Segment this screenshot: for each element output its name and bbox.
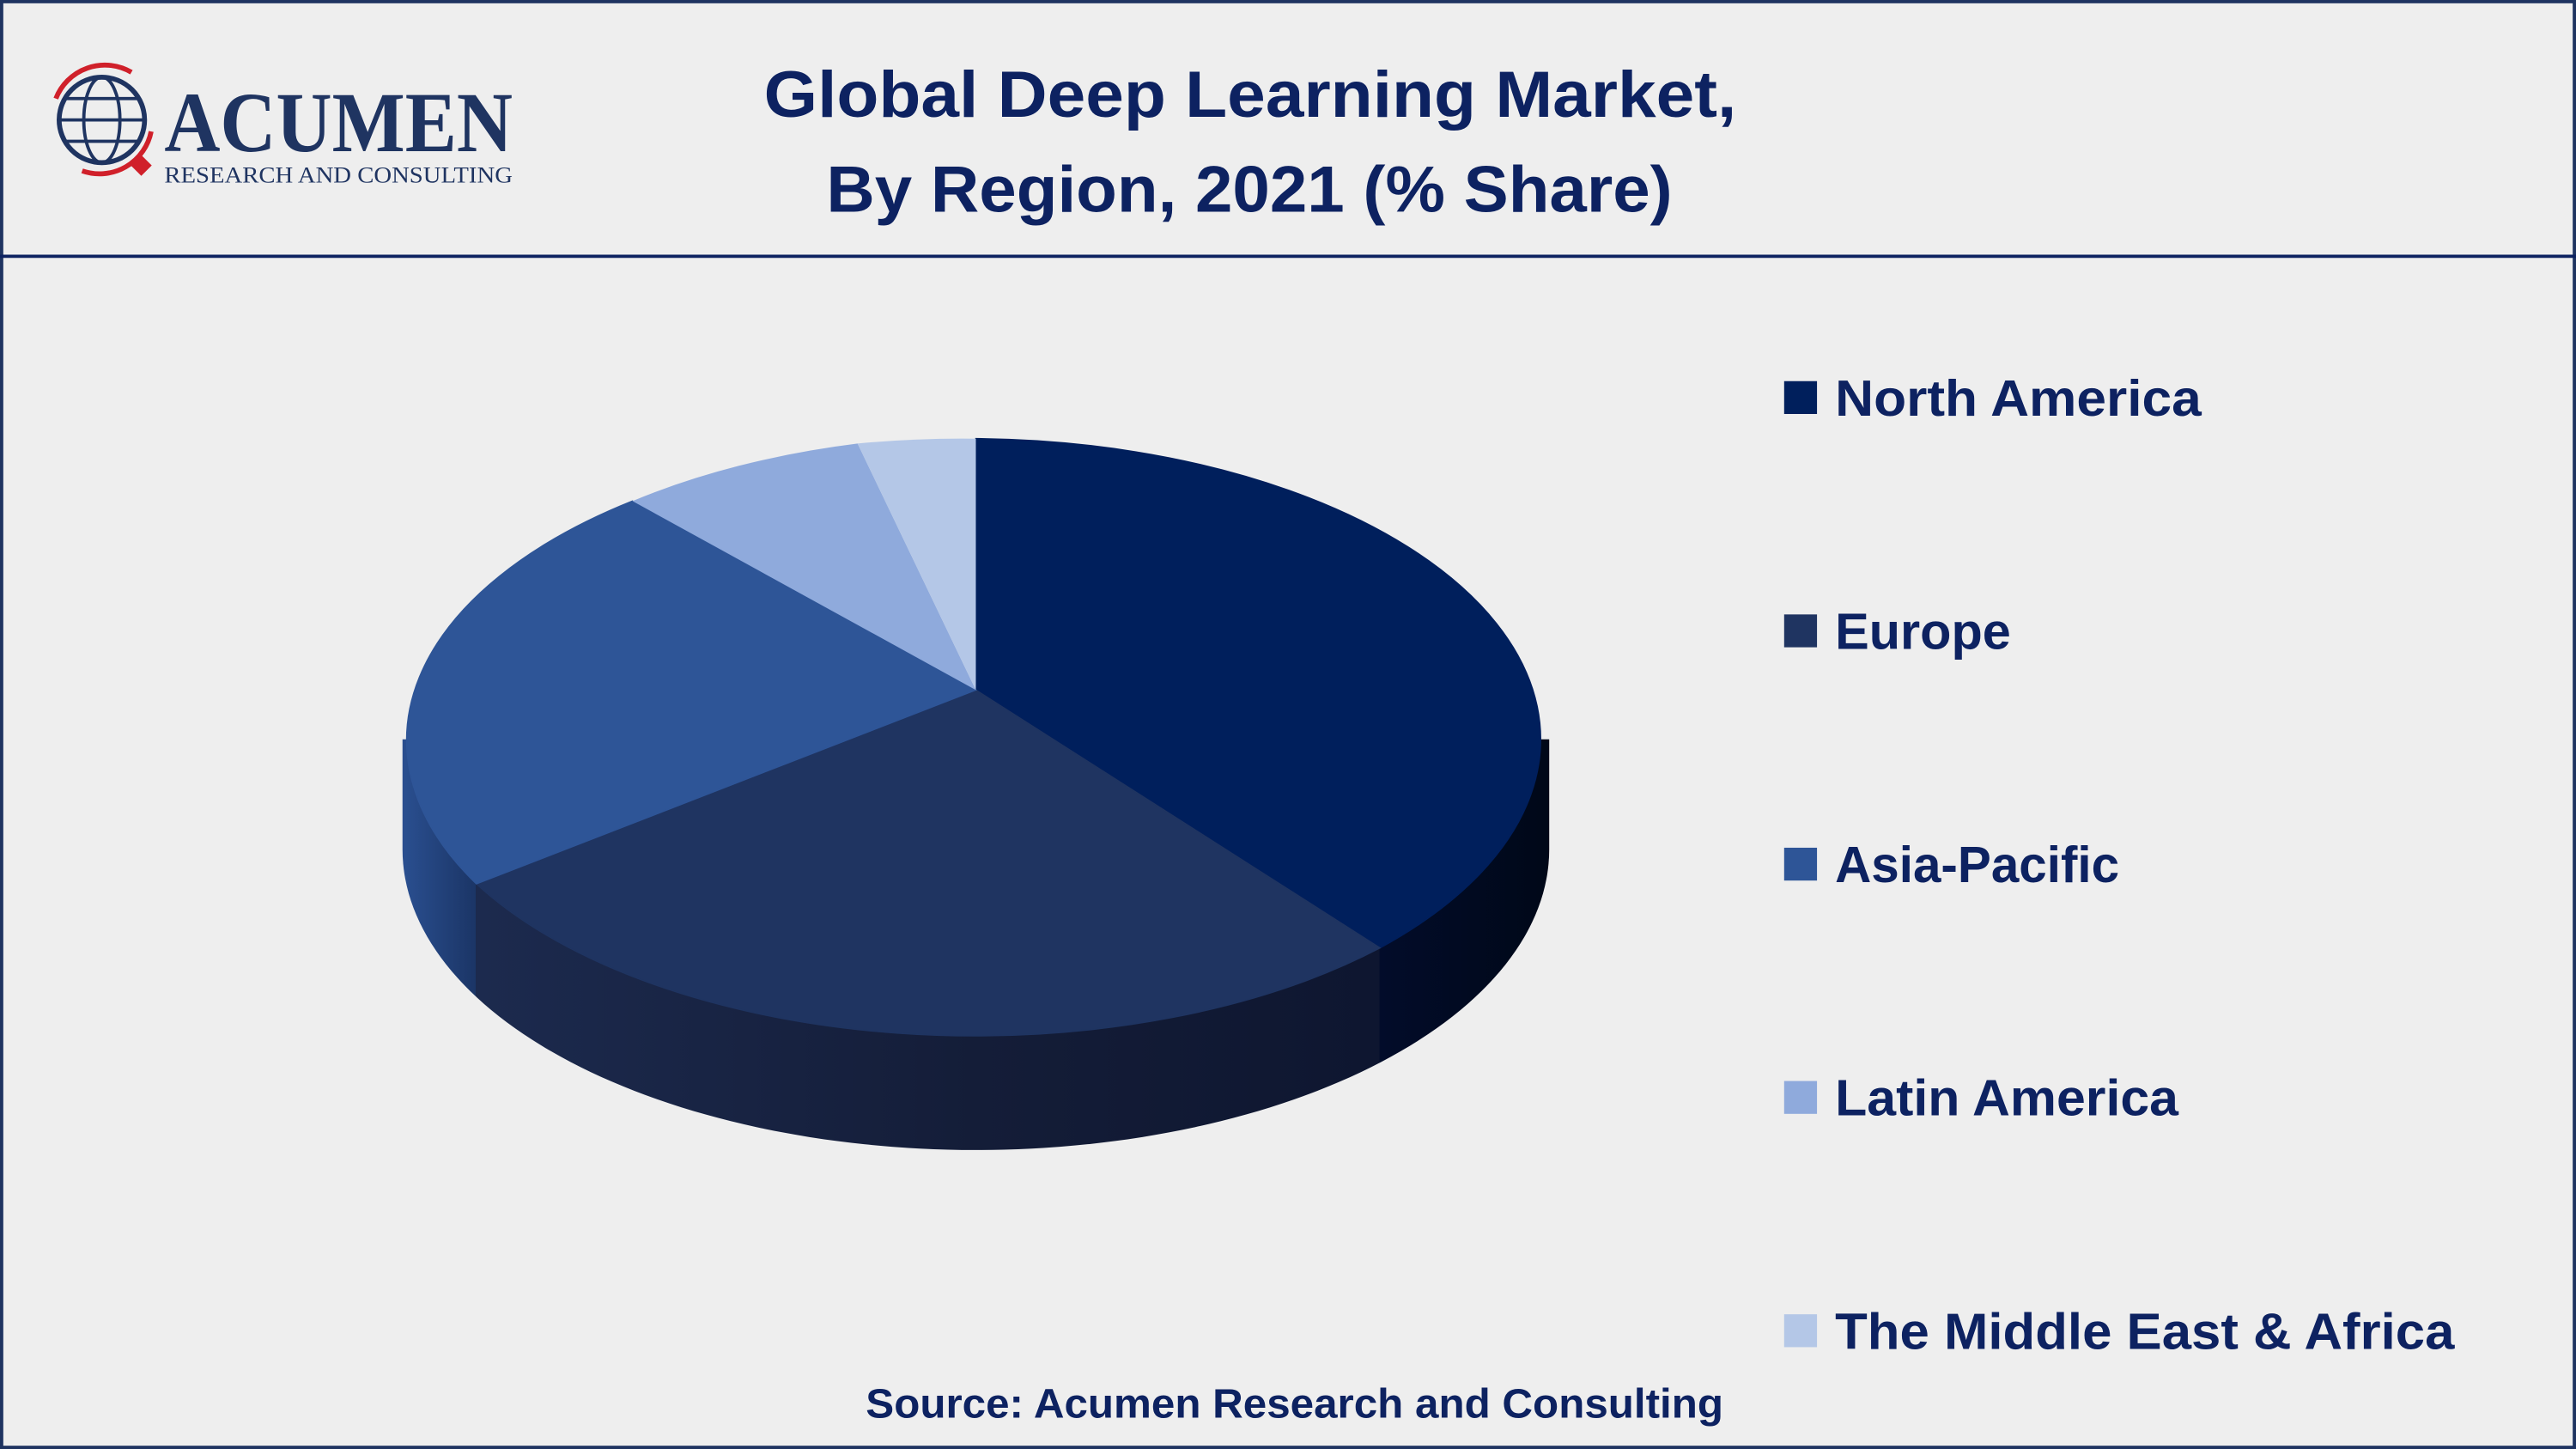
slice: North America bbox=[975, 439, 1540, 948]
logo: RESEARCH AND CONSULTING bbox=[164, 161, 513, 187]
pie chart bbox=[403, 439, 1549, 1150]
slice: Middle East & Africa bbox=[858, 439, 975, 690]
title: By Region, 2021 (% Share) bbox=[826, 154, 1673, 227]
legend item: Latin America: Latin America bbox=[1835, 1069, 2179, 1127]
legend bbox=[1784, 369, 2455, 1360]
logo bbox=[56, 65, 513, 187]
legend item: Asia-Pacific: Asia-Pacific bbox=[1835, 836, 2119, 893]
slice: Latin America bbox=[633, 443, 975, 690]
icon: globe bbox=[56, 65, 152, 176]
slice: Asia-Pacific bbox=[407, 501, 975, 884]
pie side bbox=[403, 740, 1549, 1150]
title: Global Deep Learning Market, bbox=[764, 58, 1736, 131]
legend item: Europe: Europe bbox=[1835, 603, 2011, 661]
source: Source: Acumen Research and Consulting bbox=[866, 1382, 1723, 1428]
legend item: North America: North America bbox=[1835, 369, 2202, 427]
logo: ACUMEN bbox=[164, 75, 513, 170]
title bbox=[764, 58, 1736, 227]
legend item: Middle East & Africa: The Middle East & Africa bbox=[1835, 1302, 2455, 1360]
slice: Europe bbox=[477, 690, 1380, 1036]
